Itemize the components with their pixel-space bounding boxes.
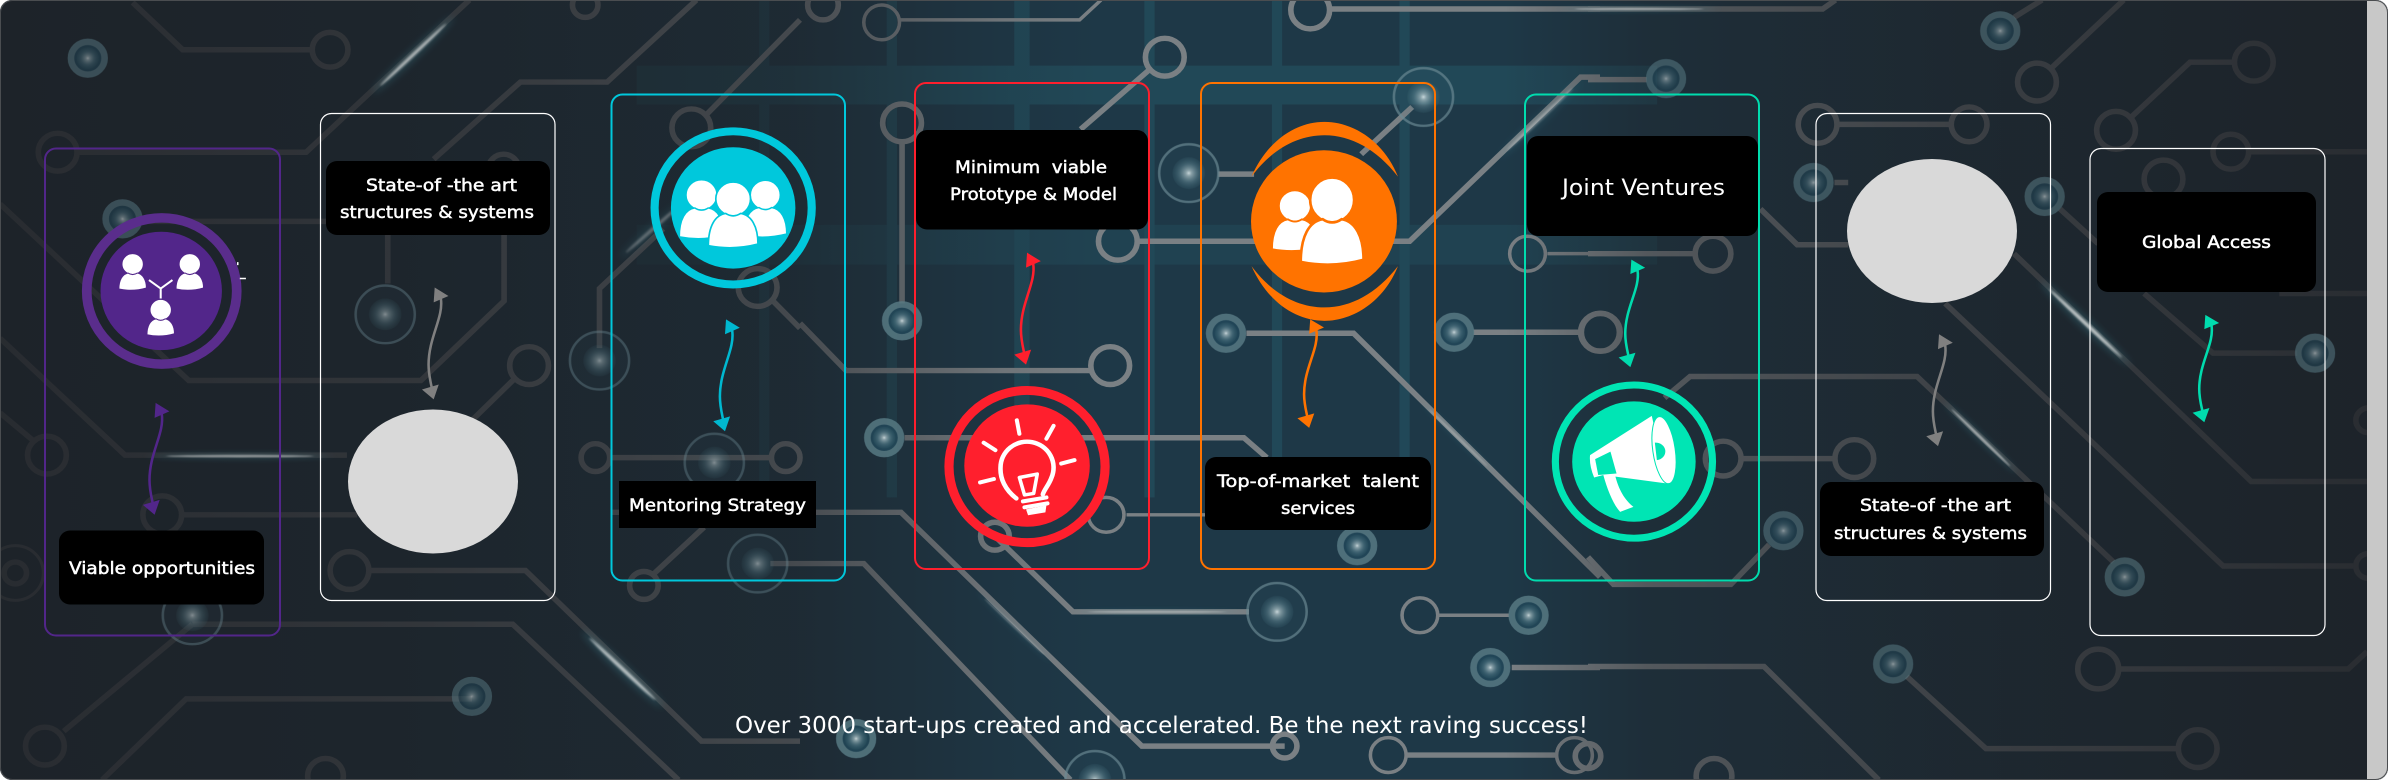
icon: megaphone xyxy=(1555,385,1712,538)
arrow: two-way orange xyxy=(1297,319,1324,428)
step 7: state-of-the-art structures xyxy=(1816,114,2050,600)
panel outline: teal xyxy=(1525,94,1759,580)
panel outline: white xyxy=(320,114,555,600)
step 8: global access xyxy=(2090,148,2325,636)
traces centre xyxy=(800,0,1619,780)
label box xyxy=(1820,482,2044,556)
panel outline: white xyxy=(1816,114,2050,600)
icon: two people with crescents xyxy=(1251,122,1398,321)
step 4: minimum viable prototype xyxy=(915,83,1149,569)
traces left xyxy=(0,0,800,780)
label box: Mentoring Strategy xyxy=(629,496,806,516)
panel outline: purple xyxy=(45,148,280,636)
label box: structures & systems xyxy=(340,203,534,223)
label box: Viable opportunities xyxy=(69,559,255,579)
glow nodes right and streaks xyxy=(1560,6,2332,680)
label box xyxy=(916,130,1148,230)
arrow: two-way grey xyxy=(422,287,448,399)
label box xyxy=(59,530,264,604)
glow nodes centre and streaks xyxy=(839,68,1583,780)
step 3: mentoring strategy xyxy=(612,94,845,580)
label box: Joint Ventures xyxy=(1560,176,1725,201)
label box xyxy=(1527,136,1758,236)
glow nodes left and streaks xyxy=(71,13,787,713)
arrow: two-way red xyxy=(1014,253,1041,365)
traces right xyxy=(1575,0,2381,780)
label box xyxy=(2097,192,2316,292)
label box: services xyxy=(1281,499,1355,519)
label box: Top-of-market talent xyxy=(1216,472,1419,492)
label box: Prototype & Model xyxy=(950,185,1117,205)
tagline: Over 3000 start-ups created and accelerated. Be the next raving success! xyxy=(735,713,1588,739)
scrollbar strip xyxy=(2367,0,2388,780)
arrow: two-way cyan xyxy=(713,319,740,431)
pcb grid pattern xyxy=(826,1,1657,498)
arrow: two-way grey xyxy=(1926,334,1953,446)
icon: network of people xyxy=(87,218,246,364)
panel outline: red xyxy=(915,83,1149,569)
label box: State-of -the art xyxy=(1860,496,2011,516)
label box xyxy=(326,161,550,235)
panel outline: orange xyxy=(1201,83,1435,569)
arrow: two-way teal xyxy=(2193,315,2219,422)
step 6: joint ventures xyxy=(1525,94,1759,580)
label box xyxy=(1205,457,1431,530)
step 2: state-of-the-art structures xyxy=(320,114,555,600)
label box: structures & systems xyxy=(1834,524,2027,544)
label box xyxy=(619,481,816,528)
icon: light bulb xyxy=(949,390,1105,543)
placeholder grey ellipse xyxy=(348,410,518,554)
icon: team of people xyxy=(655,131,812,285)
step 5: top-of-market talent services xyxy=(1201,83,1435,569)
label box: Global Access xyxy=(2142,233,2271,253)
panel outline: cyan xyxy=(612,94,845,580)
panel outline: white xyxy=(2090,148,2325,636)
arrow: two-way teal xyxy=(1619,260,1645,367)
arrow: two-way purple xyxy=(143,403,169,515)
label box: State-of -the art xyxy=(366,176,517,196)
label box: Minimum viable xyxy=(955,158,1107,178)
placeholder grey ellipse xyxy=(1847,159,2017,303)
step 1: viable opportunities xyxy=(45,148,280,636)
